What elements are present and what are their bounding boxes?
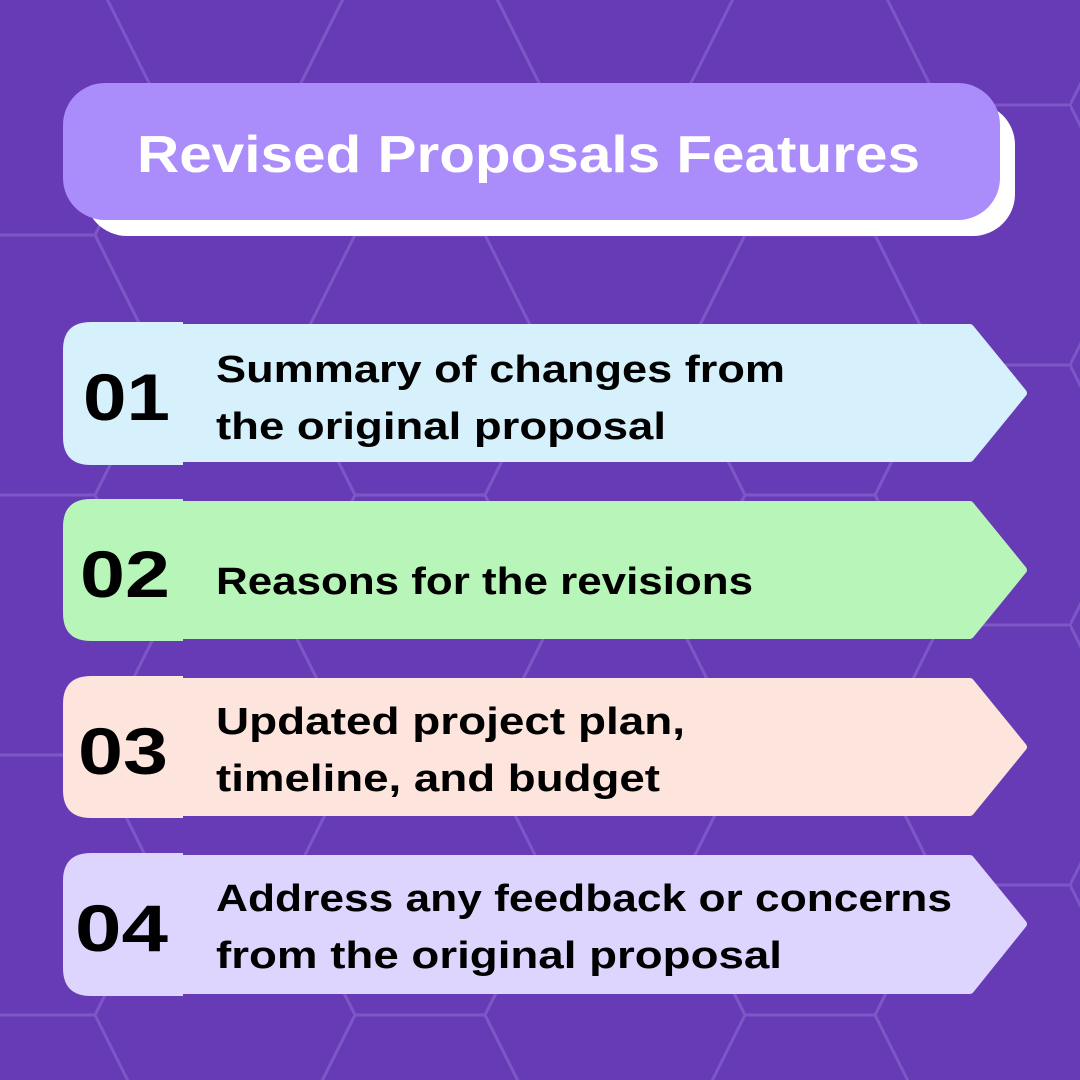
- card 01: Summary of changes from: [216, 349, 785, 391]
- card 01: the original proposal: [216, 406, 666, 448]
- card 04: [63, 853, 1023, 996]
- card 02: Reasons for the revisions: [216, 561, 753, 603]
- card 04: Address any feedback or concerns: [216, 878, 952, 920]
- card 03: timeline, and budget: [216, 758, 660, 800]
- title: [63, 83, 1015, 236]
- card 02: 02: [80, 537, 170, 611]
- title: Revised Proposals Features: [137, 126, 920, 184]
- card 01: 01: [83, 360, 170, 434]
- card 04: from the original proposal: [216, 935, 782, 977]
- card 03: Updated project plan,: [216, 701, 685, 743]
- card 04: 04: [75, 891, 168, 965]
- card 02: [63, 499, 1023, 641]
- card 03: [63, 676, 1023, 818]
- card 03: 03: [78, 714, 168, 788]
- card 01: [63, 322, 1023, 465]
